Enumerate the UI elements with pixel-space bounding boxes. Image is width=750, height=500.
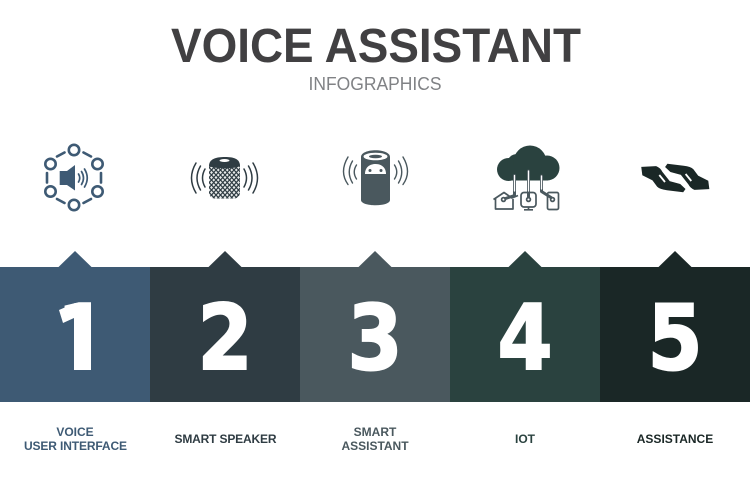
panel: step 2: 2 [197, 285, 253, 390]
label: iot: IOT [515, 432, 536, 446]
label: voice user interface: USER INTERFACE [24, 439, 127, 453]
icon: smart speaker [192, 157, 258, 198]
panel: step 5: 5 [647, 285, 703, 390]
panel: step 5 [600, 251, 750, 402]
icon: voice user interface [45, 145, 103, 210]
label: assistance: ASSISTANCE [637, 432, 713, 446]
icon: iot cloud [494, 146, 560, 210]
panel: step 1: 1 [56, 285, 112, 390]
icon: helping hands [642, 164, 709, 192]
title: VOICE ASSISTANT [171, 20, 581, 73]
panel: step 1 [0, 251, 150, 402]
label: smart assistant: SMART [354, 425, 397, 439]
panel: step 2 [150, 251, 300, 402]
panel: step 4: 4 [497, 285, 553, 390]
label: smart speaker: SMART SPEAKER [174, 432, 277, 446]
label: voice user interface: VOICE [56, 425, 94, 439]
icon: smart assistant [344, 150, 408, 205]
panel: step 3: 3 [347, 285, 403, 390]
label: smart assistant: ASSISTANT [341, 439, 409, 453]
subtitle: INFOGRAPHICS [308, 74, 442, 94]
panel: step 4 [450, 251, 600, 402]
panel: step 3 [300, 251, 450, 402]
